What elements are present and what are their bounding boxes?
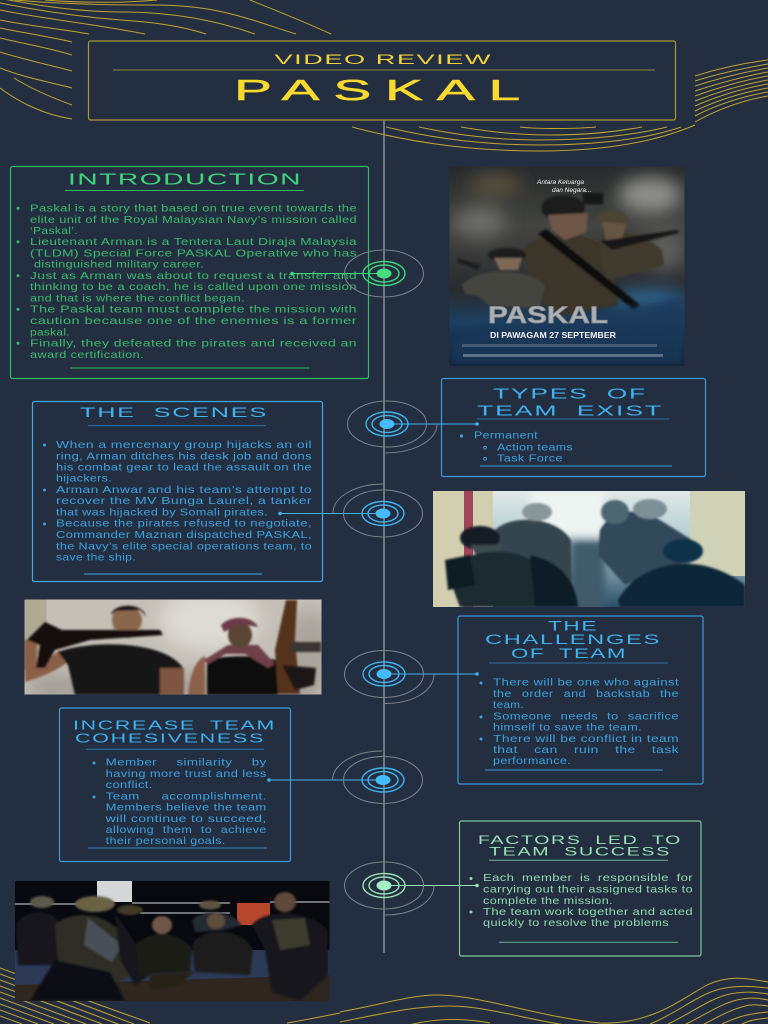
text block: challenges bullets: team.: [493, 700, 524, 711]
connector: scenes: [278, 512, 383, 515]
text block: team types list: Permanent: [474, 430, 538, 441]
photo: two men with rifles: [24, 600, 322, 694]
text block: cohesiveness bullets: Team accomplishment.: [106, 792, 267, 802]
text block: introduction bullets: and that is where the conflict began.: [30, 294, 245, 304]
text block: introduction bullets: [16, 204, 357, 361]
heading: increase team cohesiveness: COHESIVENESS: [75, 732, 265, 746]
timeline node: challenges: [344, 650, 434, 704]
text block: introduction bullets: (TLDM) Special Force PASKAL Operative who has: [30, 248, 357, 260]
photo: movie poster: dan Negara...: [552, 187, 592, 194]
header panel: [88, 41, 676, 120]
text block: factors bullets: quickly to resolve the problems: [483, 918, 669, 929]
text block: factors bullets: complete the mission.: [483, 896, 613, 907]
timeline node: scenes: [333, 484, 422, 537]
text block: scenes bullets: the Navy’s elite special operations team, to: [56, 541, 312, 552]
text block: factors bullets: Each member is responsible for: [483, 873, 693, 884]
panel: introduction: [10, 166, 368, 378]
panel: increase team cohesiveness: [60, 708, 290, 862]
heading: types of team exist: [477, 386, 663, 419]
text block: challenges bullets: himself to save the team.: [493, 723, 642, 734]
decorative waves: bottom: [0, 968, 768, 1024]
text block: introduction bullets: Just as Arman was about to request a transfer and: [30, 271, 357, 282]
text block: team types list: Action teams: [497, 442, 573, 453]
panel: factors led to team success: [460, 821, 701, 956]
connector: introduction: [290, 272, 384, 275]
photo: team on ship deck: [15, 881, 330, 1001]
heading: types of team exist: TEAM EXIST: [477, 403, 663, 419]
heading: the scenes: THE SCENES: [80, 404, 268, 420]
heading: increase team cohesiveness: INCREASE TEAM: [73, 718, 276, 732]
text block: scenes bullets: hijackers.: [56, 473, 112, 484]
text block: introduction bullets: Finally, they defeated the pirates and received an: [30, 338, 357, 350]
text block: scenes bullets: that was hijacked by Somali pirates.: [56, 507, 268, 518]
panel: types of team exist: [442, 378, 706, 476]
heading: the challenges of team: OF TEAM: [511, 645, 627, 661]
text block: introduction bullets: award certification.: [30, 350, 144, 361]
heading: factors led to team success: FACTORS LED TO: [478, 835, 682, 847]
panel: the scenes: [32, 402, 322, 582]
timeline node: cohesiveness: [332, 751, 422, 804]
heading: the challenges of team: CHALLENGES: [485, 631, 661, 647]
text block: cohesiveness bullets: Members believe the team: [106, 803, 267, 814]
text block: challenges bullets: performance.: [493, 756, 571, 767]
text block: challenges bullets: that can ruin the task: [493, 745, 680, 756]
text block: cohesiveness bullets: their personal goals.: [106, 836, 226, 847]
panel: the challenges of team: [458, 616, 703, 784]
heading: the challenges of team: [485, 618, 661, 661]
poster tagline: Antara Keluarga: [536, 179, 584, 186]
timeline node: types of team: [348, 401, 437, 453]
text block: challenges bullets: There will be one who against: [493, 678, 679, 688]
poster release date: DI PAWAGAM 27 SEPTEMBER: [490, 330, 616, 340]
timeline node: introduction: [344, 250, 424, 297]
heading: increase team cohesiveness: [73, 718, 276, 746]
heading: factors led to team success: [478, 835, 682, 858]
text block: team types list: Task Force: [497, 453, 563, 464]
text block: introduction bullets: Paskal is a story that based on true event towards the: [30, 204, 357, 214]
text block: challenges bullets: Someone needs to sacrifice: [493, 712, 679, 722]
text block: scenes bullets: When a mercenary group hijacks an oil: [56, 440, 312, 451]
timeline node: factors: [344, 862, 434, 915]
text block: factors bullets: [470, 873, 693, 929]
photo: movie poster: [449, 166, 690, 366]
text block: scenes bullets: his combat gear to lead the assault on the: [56, 462, 312, 473]
text block: scenes bullets: [43, 440, 312, 563]
connector: challenges: [384, 672, 479, 676]
subtitle: VIDEO REVIEW: [274, 51, 492, 67]
text block: challenges bullets: the order and backstab the: [493, 689, 679, 700]
text block: cohesiveness bullets: having more trust and less: [106, 769, 267, 780]
heading: the challenges of team: THE: [548, 618, 598, 634]
text block: introduction bullets: caution because one of the enemies is a former: [30, 316, 357, 327]
text block: cohesiveness bullets: conflict.: [106, 780, 153, 791]
text block: introduction bullets: paskal.: [30, 327, 70, 338]
connector: cohesiveness: [267, 778, 383, 782]
text block: cohesiveness bullets: [92, 758, 267, 847]
poster title: PASKAL: [488, 302, 608, 329]
text block: scenes bullets: Because the pirates refused to negotiate,: [56, 518, 312, 529]
text block: challenges bullets: There will be conflict in team: [493, 734, 679, 745]
text block: introduction bullets: Lieutenant Arman is a Tentera Laut Diraja Malaysia: [30, 237, 357, 248]
text block: cohesiveness bullets: will continue to succeed,: [104, 814, 267, 825]
heading: introduction: INTRODUCTION: [68, 171, 302, 188]
heading: factors led to team success: TEAM SUCCESS: [489, 846, 671, 858]
text block: introduction bullets: distinguished military career.: [34, 260, 204, 271]
text block: cohesiveness bullets: allowing them to achieve: [106, 825, 267, 836]
timeline vertical line: [383, 120, 385, 953]
text block: introduction bullets: elite unit of the Royal Malaysian Navy’s mission called: [30, 215, 357, 226]
text block: team types list: [460, 430, 573, 464]
connector: factors: [384, 884, 479, 887]
text block: scenes bullets: Commander Maznan dispatched PASKAL,: [56, 530, 312, 541]
text block: scenes bullets: ring, Arman ditches his desk job and dons: [56, 451, 312, 462]
connector: types of team: [387, 422, 479, 426]
decorative waves: top right: [352, 60, 768, 151]
text block: scenes bullets: Arman Anwar and his team’s attempt to: [56, 485, 312, 496]
heading: types of team exist: TYPES OF: [493, 386, 647, 402]
photo: soldiers in corridor: [433, 491, 745, 610]
text block: introduction bullets: ‘Paskal’.: [30, 226, 78, 237]
text block: scenes bullets: save the ship.: [56, 552, 136, 563]
text block: introduction bullets: thinking to be a coach, he is called upon one mission: [30, 282, 357, 293]
text block: scenes bullets: recover the MV Bunga Laurel, a tanker: [56, 496, 312, 507]
text block: cohesiveness bullets: Member similarity by: [106, 758, 267, 768]
text block: factors bullets: carrying out their assigned tasks to: [483, 884, 693, 896]
text block: introduction bullets: The Paskal team must complete the mission with: [30, 305, 357, 316]
text block: challenges bullets: [480, 678, 680, 767]
text block: factors bullets: The team work together and acted: [483, 907, 693, 918]
decorative waves: top left: [0, 0, 331, 119]
title: PASKAL: [234, 75, 534, 107]
